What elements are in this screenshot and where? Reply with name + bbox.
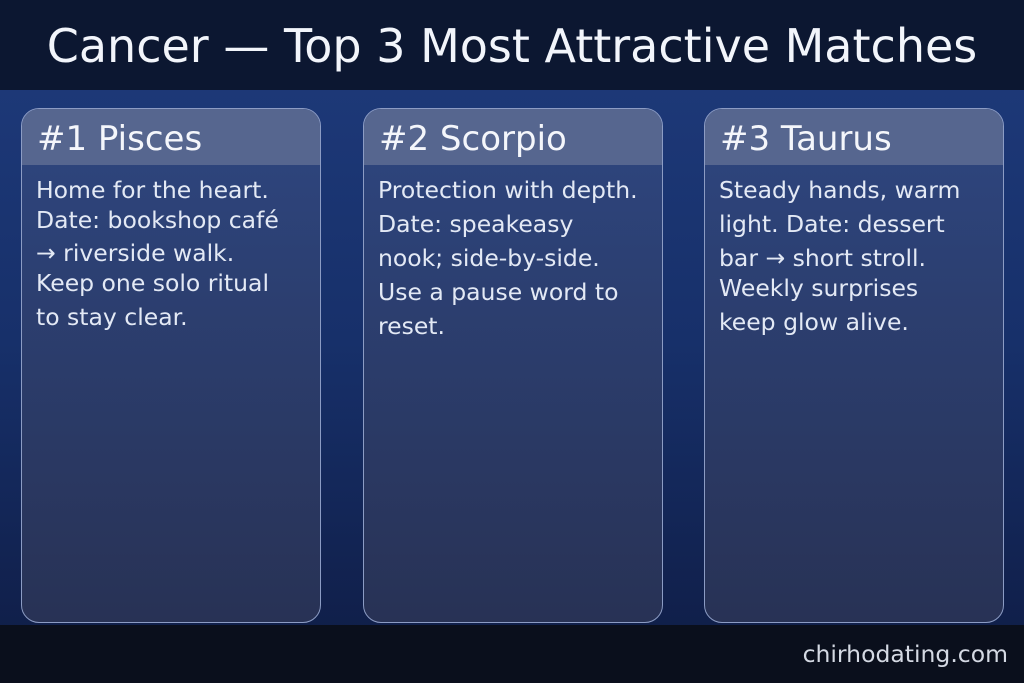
panel: scorpio	[363, 108, 663, 623]
text: scorpio: Use a pause word to	[378, 278, 618, 306]
text: pisces: Home for the heart.	[36, 176, 269, 204]
text: scorpio: Date: speakeasy	[378, 210, 573, 238]
text: taurus: Weekly surprises	[719, 274, 918, 302]
heading: scorpio: #2 Scorpio	[379, 119, 567, 159]
text: scorpio: nook; side-by-side.	[378, 244, 600, 272]
text: taurus	[719, 176, 960, 336]
panel: pisces	[21, 108, 321, 623]
text: taurus: keep glow alive.	[719, 308, 909, 336]
text: pisces: Keep one solo ritual	[36, 269, 269, 297]
heading: scorpio	[364, 109, 662, 165]
text: pisces	[36, 176, 279, 331]
heading: taurus	[705, 109, 1003, 165]
text: taurus: bar → short stroll.	[719, 244, 926, 272]
text: scorpio: reset.	[378, 312, 445, 340]
title: Cancer — Top 3 Most Attractive Matches	[47, 19, 977, 73]
footer url: chirhodating.com	[803, 640, 1008, 668]
heading: pisces: #1 Pisces	[37, 119, 202, 159]
text: pisces: to stay clear.	[36, 303, 188, 331]
text: pisces: Date: bookshop café	[36, 206, 279, 234]
heading: taurus: #3 Taurus	[720, 119, 892, 159]
text: taurus: Steady hands, warm	[719, 176, 960, 204]
text: pisces: → riverside walk.	[36, 239, 234, 267]
text: scorpio: Protection with depth.	[378, 176, 638, 204]
text: scorpio	[378, 176, 638, 340]
heading: pisces	[22, 109, 320, 165]
text: taurus: light. Date: dessert	[719, 210, 945, 238]
panel: taurus	[704, 108, 1004, 623]
